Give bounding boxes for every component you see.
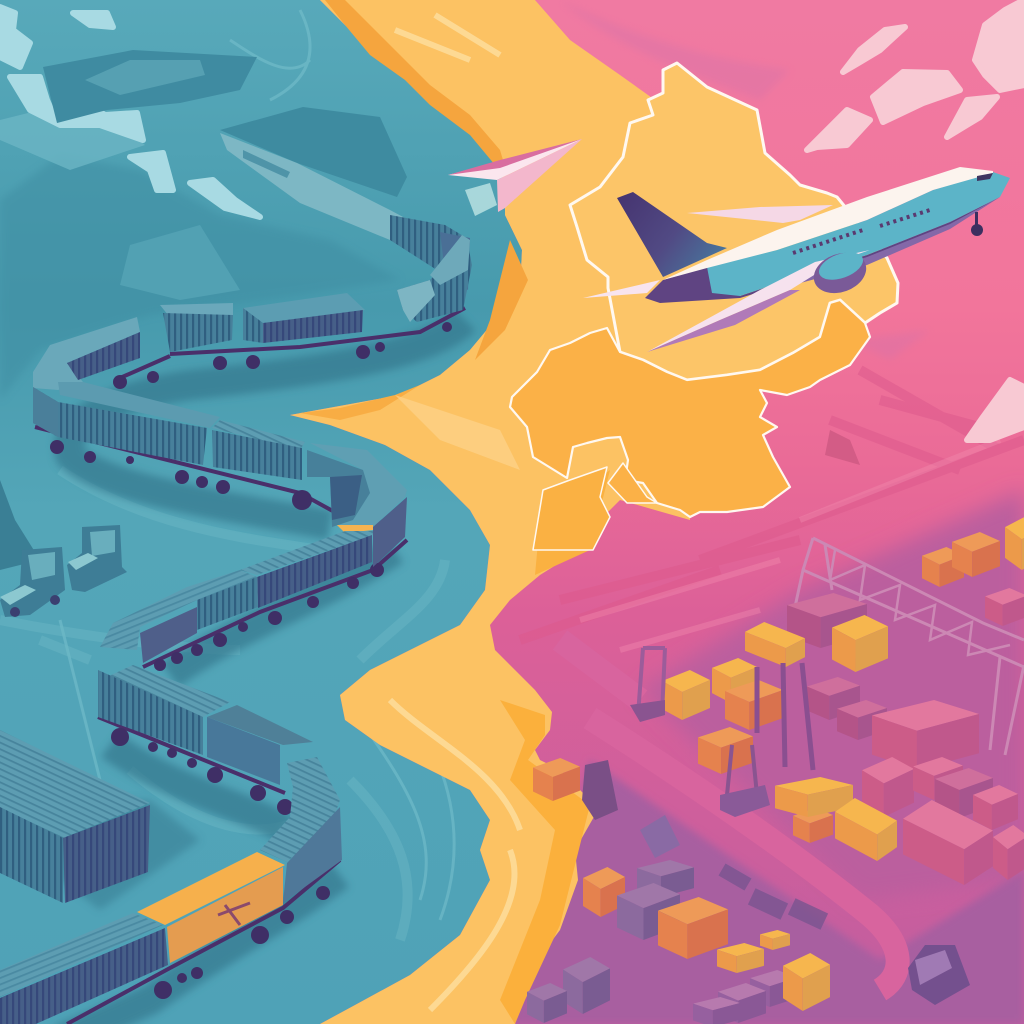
illustration: port towers and forklifts bbox=[582, 648, 970, 1005]
bottom right vehicle bbox=[908, 945, 970, 1005]
map: northern region bbox=[570, 63, 898, 380]
forklift two bbox=[67, 525, 127, 592]
panel: clouds bbox=[0, 0, 1024, 440]
small vehicles bbox=[719, 863, 828, 930]
forklift lower bbox=[582, 760, 618, 820]
map: southern region bbox=[510, 300, 870, 517]
clouds left bbox=[0, 7, 260, 217]
crates far right bbox=[787, 593, 867, 648]
fuselage white top bbox=[663, 167, 993, 280]
top containers bbox=[160, 293, 365, 352]
panel: yellow river and coast bbox=[290, 0, 700, 1024]
central tower bbox=[757, 663, 813, 770]
forklift one bbox=[0, 547, 65, 617]
engine bbox=[808, 246, 872, 300]
crates middle bbox=[807, 677, 860, 720]
near wing bbox=[647, 250, 870, 352]
locomotive cab and curve bbox=[307, 443, 407, 567]
teal mountains bbox=[220, 107, 407, 197]
fuselage teal band bbox=[707, 172, 1010, 296]
train wheels bbox=[50, 322, 452, 999]
far wing bbox=[687, 205, 833, 223]
illustration: large container bottom left bbox=[0, 730, 150, 903]
panel: teal landscape bbox=[0, 0, 522, 1024]
forklift mast left bbox=[638, 648, 665, 715]
cabin windows bbox=[793, 210, 930, 253]
tail fin bbox=[617, 192, 727, 277]
train rails bbox=[35, 308, 465, 1024]
landing gear bbox=[971, 212, 983, 236]
yellow container bbox=[137, 852, 285, 963]
illustration: distant faded train bbox=[220, 133, 470, 290]
middle containers bbox=[100, 531, 373, 663]
illustration: port crates bbox=[527, 515, 1024, 1024]
fuselage belly stripe bbox=[793, 197, 1000, 285]
long containers bbox=[33, 382, 305, 480]
tailplane bbox=[583, 280, 660, 298]
lower containers bbox=[98, 665, 313, 785]
train shadow bbox=[60, 320, 465, 1024]
train: freight train winding through teal landscape bbox=[0, 235, 472, 1024]
map: China bbox=[510, 63, 898, 550]
icon: paper plane bbox=[448, 139, 582, 216]
map: south-west region bbox=[533, 467, 610, 550]
illustration: port gantry crane bbox=[795, 538, 1024, 755]
map: south-east peninsula bbox=[608, 463, 657, 503]
cockpit windows bbox=[977, 173, 993, 181]
left curve wagon bbox=[33, 317, 140, 390]
crates stacked right bbox=[872, 700, 979, 770]
curve containers bbox=[260, 757, 342, 903]
last container bbox=[0, 913, 168, 1024]
illustration: distant ship bbox=[43, 50, 257, 123]
fuselage underside bbox=[645, 197, 1000, 303]
forklift centre bbox=[727, 745, 757, 795]
top far wagon bbox=[397, 240, 472, 322]
icon: forklifts left bbox=[0, 525, 127, 617]
crates bottom bbox=[533, 758, 580, 801]
icon: airplane bbox=[583, 167, 1010, 352]
clouds right bbox=[807, 0, 1024, 440]
